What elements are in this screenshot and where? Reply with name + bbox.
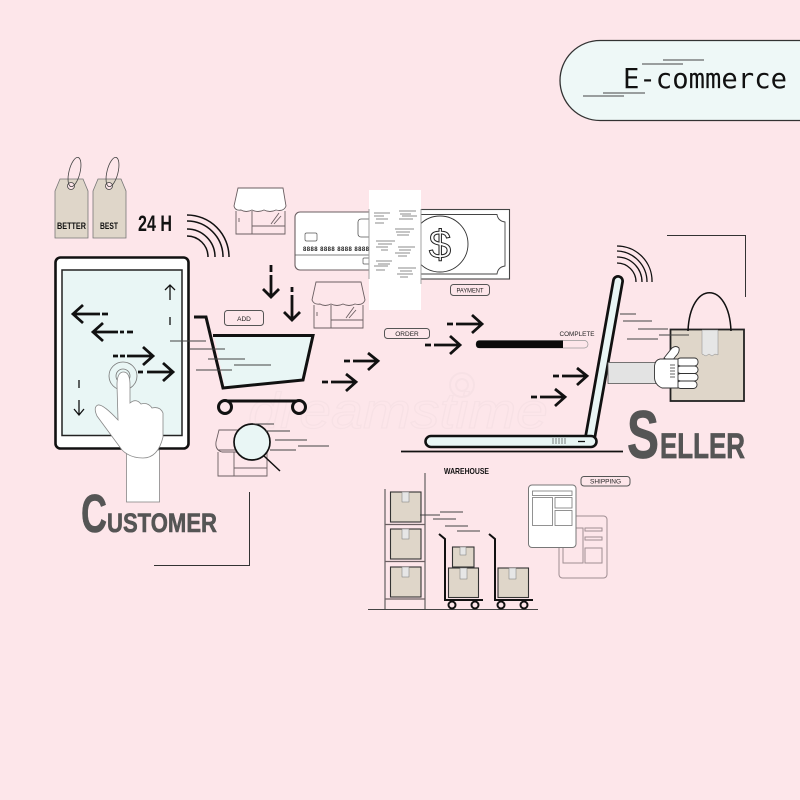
title banner — [560, 40, 800, 120]
icon: banknote: $ — [429, 223, 451, 267]
arrows: cart to order — [322, 353, 378, 391]
WAREHOUSE heading: WAREHOUSE — [444, 466, 489, 476]
corner bracket: seller — [667, 236, 746, 297]
heading: customer — [81, 484, 217, 544]
icon: wifi signal right — [617, 246, 652, 282]
progress bar: complete — [476, 331, 595, 348]
icon: store top — [234, 188, 286, 234]
hand trolley with one box — [489, 534, 533, 608]
icon: credit card: 8888 8888 8888 8888 — [303, 247, 370, 253]
title banner: E-commerce — [623, 62, 787, 95]
SHIPPING label: SHIPPING — [590, 478, 621, 486]
PAYMENT label — [450, 284, 490, 296]
heading: seller: S — [627, 397, 659, 473]
ADD label: ADD — [237, 316, 251, 323]
PAYMENT label: PAYMENT — [456, 288, 484, 294]
warehouse rack — [368, 473, 538, 610]
arrows: order to complete — [425, 315, 482, 354]
swipe arrows — [73, 285, 175, 415]
ADD label — [224, 310, 264, 326]
heading: customer: C — [81, 484, 107, 544]
icon: pointing hand — [95, 372, 163, 502]
24 H label: 24 H — [138, 211, 172, 236]
icon: banknote — [412, 210, 510, 279]
tag: best: BEST — [100, 221, 118, 232]
icon: shopping cart — [190, 317, 313, 414]
hand trolley with two boxes — [439, 534, 483, 608]
progress bar: complete: COMPLETE — [560, 331, 595, 338]
shipping document back — [559, 516, 607, 578]
icon: store with magnifier — [216, 424, 329, 476]
corner bracket: customer — [154, 492, 250, 566]
receipt — [369, 190, 421, 310]
rack box top — [390, 492, 421, 522]
icon: laptop — [401, 281, 623, 452]
shipping document front — [528, 485, 576, 548]
ORDER label — [384, 328, 430, 338]
arrows: toward laptop — [531, 368, 587, 406]
arm — [608, 362, 656, 384]
icon: wifi signal left — [187, 215, 229, 257]
rack box bottom — [390, 567, 421, 597]
heading: seller: ELLER — [660, 427, 745, 466]
tag: better: BETTER — [57, 221, 86, 232]
price tags — [55, 156, 126, 238]
heading: seller — [627, 397, 745, 473]
ORDER label: ORDER — [395, 331, 419, 338]
icon: credit card — [295, 212, 375, 270]
watermark: dreamstime — [248, 383, 548, 439]
rack box middle — [390, 529, 421, 559]
thumb-up hand — [654, 346, 698, 388]
touch ripple — [109, 362, 137, 390]
icon: tablet — [56, 258, 206, 448]
arrows: add to cart — [263, 265, 300, 320]
SHIPPING label — [581, 476, 630, 486]
heading: customer: USTOMER — [107, 508, 217, 538]
icon: store middle — [312, 282, 365, 328]
icon: shopping bag held by hand — [608, 293, 744, 401]
